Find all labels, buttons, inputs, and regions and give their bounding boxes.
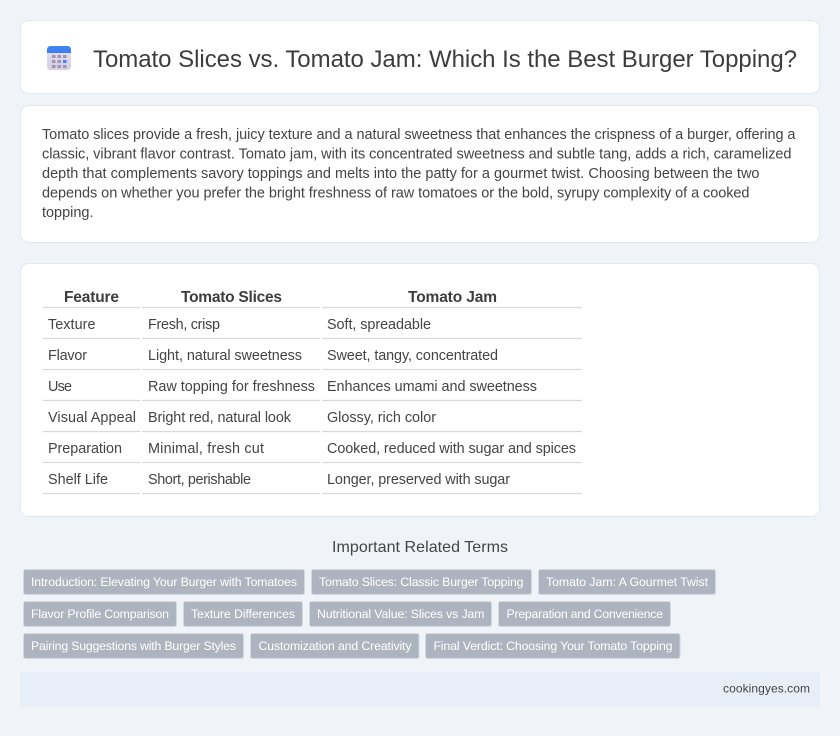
tag: Final Verdict: Choosing Your Tomato Topping [434, 639, 673, 653]
row: use: Raw topping for freshness [148, 379, 315, 395]
text block: introduction paragraph: classic, vibrant flavor contrast. Tomato jam, with its concentrated sweetness and subtle tang, adds a rich, caramelized [42, 146, 792, 162]
row: use: Enhances umami and sweetness [327, 379, 537, 395]
table header: Feature [64, 289, 119, 306]
table header: Tomato Slices [181, 289, 282, 306]
icon: calendar [47, 46, 71, 70]
row: preparation: Minimal, fresh cut [148, 441, 264, 457]
tag [312, 570, 532, 594]
panel: header [20, 20, 820, 94]
row: visual appeal: Bright red, natural look [148, 410, 292, 426]
panel: comparison table [20, 264, 820, 516]
text block: introduction paragraph: topping. [42, 205, 94, 221]
tag [24, 602, 176, 626]
row: visual appeal: Glossy, rich color [327, 410, 436, 426]
tag [184, 602, 302, 626]
tag: Preparation and Convenience [506, 607, 663, 621]
tag [426, 634, 680, 658]
tag: Pairing Suggestions with Burger Styles [31, 639, 236, 653]
row: texture: Soft, spreadable [327, 317, 431, 333]
tag: Tomato Jam: A Gourmet Twist [546, 575, 709, 589]
text block: introduction paragraph [42, 127, 796, 221]
footer [20, 672, 820, 706]
footer: cookingyes.com [723, 682, 810, 696]
tags: related terms [24, 570, 716, 658]
row: preparation: Cooked, reduced with sugar and spices [327, 441, 576, 457]
row: texture: Texture [48, 317, 96, 333]
tag [250, 634, 419, 658]
row: shelf life: Shelf Life [48, 472, 108, 488]
row: visual appeal [48, 410, 436, 426]
row: texture [48, 317, 431, 333]
row: preparation: Preparation [48, 441, 122, 457]
row: texture: Fresh, crisp [148, 317, 220, 333]
tag [24, 634, 244, 658]
tag: Customization and Creativity [258, 639, 412, 653]
text block: introduction paragraph: depth that complements savory toppings and melts into the patty for a gourmet twist. Choosing between the two [42, 166, 760, 182]
table header: Tomato Jam [408, 289, 497, 306]
row: preparation [48, 441, 576, 457]
text block: introduction paragraph: Tomato slices provide a fresh, juicy texture and a natural sweetness that enhances the crispness of a burger, offering a [42, 127, 796, 143]
text block: introduction paragraph: depends on whether you prefer the bright freshness of raw tomatoes or the bold, syrupy complexity of a cooked [42, 186, 750, 202]
row: shelf life: Short, perishable [148, 472, 251, 488]
row: shelf life [48, 472, 510, 488]
tag: Introduction: Elevating Your Burger with Tomatoes [31, 575, 297, 589]
tag: Texture Differences [191, 607, 295, 621]
tag [24, 570, 304, 594]
table header [64, 289, 497, 306]
heading: important related terms: Important Related Terms [332, 539, 508, 556]
tag: Flavor Profile Comparison [31, 607, 169, 621]
title: Tomato Slices vs. Tomato Jam: Which Is the Best Burger Topping? [93, 46, 797, 73]
row: visual appeal: Visual Appeal [48, 410, 136, 426]
tag [538, 570, 716, 594]
row: shelf life: Longer, preserved with sugar [327, 472, 510, 488]
row: use [48, 379, 537, 395]
tag [498, 602, 670, 626]
row: flavor [48, 348, 498, 364]
row: flavor: Flavor [48, 348, 87, 364]
row: flavor: Sweet, tangy, concentrated [327, 348, 498, 364]
tag: Tomato Slices: Classic Burger Topping [319, 575, 524, 589]
row: use: Use [48, 379, 72, 395]
tag: Nutritional Value: Slices vs Jam [317, 607, 484, 621]
row: flavor: Light, natural sweetness [148, 348, 302, 364]
panel: introduction [20, 106, 820, 242]
tag [310, 602, 492, 626]
